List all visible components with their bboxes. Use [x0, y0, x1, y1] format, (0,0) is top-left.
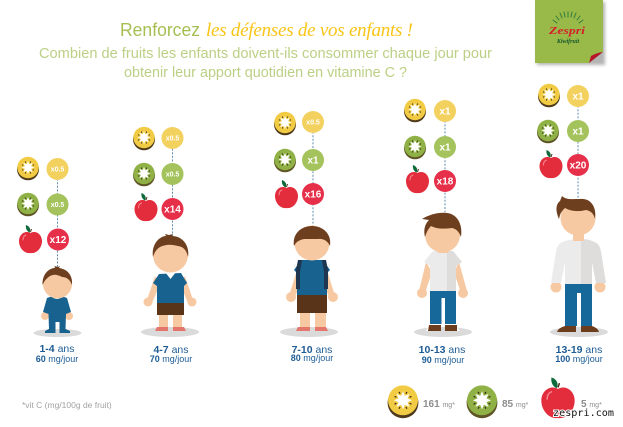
age label: 60 mg/jour [36, 354, 78, 364]
age label: 70 mg/jour [150, 354, 192, 364]
age label [291, 344, 333, 363]
column: 7-10 ans [274, 111, 338, 363]
badge x1 gold [434, 100, 456, 122]
legend: gold kiwi 161 mg [388, 385, 455, 418]
icon: gold kiwi [274, 112, 296, 135]
logo tag: Kiwifruit [556, 39, 580, 45]
badge x1 gold: x1 [439, 106, 451, 118]
figure: toddler [34, 266, 82, 337]
badge x0.5 gold: x0.5 [306, 120, 320, 126]
legend: green kiwi 85 mg [467, 385, 529, 418]
badge x1 green [567, 120, 589, 142]
badge x0.5 gold [162, 127, 184, 149]
footnote: *vit C (mg/100g de fruit) [22, 400, 112, 410]
badge x0.5 gold [46, 158, 68, 180]
figure: child with backpack [280, 226, 338, 337]
badge x12: x12 [50, 235, 67, 246]
age label [419, 344, 465, 365]
badge x1 green [302, 149, 324, 171]
badge x1 green [434, 136, 456, 158]
badge x20: x20 [570, 160, 587, 172]
column: 13-19 ans [537, 84, 608, 364]
legend: green kiwi 85 mg: 85 mg* [502, 399, 529, 410]
age label: 13-19 ans [556, 344, 602, 356]
badge x0.5 green: x0.5 [51, 202, 64, 209]
icon: gold kiwi [17, 157, 39, 180]
badge x0.5 green: x0.5 [166, 172, 179, 178]
icon: gold kiwi [133, 127, 155, 150]
badge x1 gold: x1 [572, 92, 584, 102]
age label [150, 344, 192, 364]
logo tag [535, 0, 605, 65]
icon: green kiwi [274, 149, 296, 172]
age label: 80 mg/jour [291, 353, 333, 363]
icon: green kiwi [404, 136, 426, 159]
icon: apple [406, 165, 429, 193]
badge x1 green: x1 [307, 156, 319, 166]
icon: gold kiwi [538, 84, 560, 107]
badge x20 [567, 154, 589, 176]
figure: boy in white t-shirt [414, 213, 472, 337]
age label: 1-4 ans [39, 343, 75, 355]
legend: gold kiwi 161 mg: 161 mg* [423, 399, 455, 410]
age label: 90 mg/jour [422, 355, 464, 365]
figure: teenager [550, 196, 608, 337]
column: 4-7 ans [133, 127, 199, 364]
column: 10-13 ans [404, 99, 472, 365]
badge x18: x18 [437, 176, 454, 188]
badge x1 gold [567, 85, 589, 107]
age label: 100 mg/jour [555, 354, 603, 364]
age label [555, 344, 603, 364]
title: les défenses de vos enfants ! [206, 20, 413, 41]
figure: child [141, 234, 199, 337]
age label [36, 343, 78, 364]
badge x1 green: x1 [439, 142, 451, 154]
badge x0.5 gold [302, 111, 324, 133]
title: Renforcez [120, 20, 200, 40]
age label: 7-10 ans [292, 344, 332, 356]
badge x0.5 gold: x0.5 [51, 166, 64, 174]
badge x18 [434, 170, 456, 192]
legend: apple 5 mg: 5 mg* [581, 399, 602, 410]
icon: apple [134, 193, 158, 221]
badge x0.5 green [162, 163, 184, 185]
age label: 4-7 ans [153, 344, 189, 356]
badge x14: x14 [164, 204, 181, 216]
subtitle: Combien de fruits les enfants doivent-ils consommer chaque jour pour [39, 45, 492, 62]
icon: apple [275, 180, 298, 208]
badge x1 green: x1 [572, 126, 584, 138]
badge x16: x16 [305, 190, 322, 200]
icon: apple [19, 225, 42, 253]
subtitle: obtenir leur apport quotidien en vitamine C ? [124, 64, 407, 81]
subtitle [39, 45, 492, 81]
icon: green kiwi [537, 120, 559, 143]
badge x0.5 gold: x0.5 [166, 136, 179, 142]
icon: green kiwi [17, 193, 39, 216]
icon: green kiwi [133, 163, 155, 186]
badge x0.5 green [46, 194, 68, 216]
icon: apple [540, 150, 562, 178]
column: 1-4 ans [17, 157, 82, 364]
logo tag: Zespri [548, 25, 586, 37]
badge x14 [162, 198, 184, 220]
watermark: zespri.com [553, 408, 614, 419]
icon: gold kiwi [404, 99, 426, 122]
badge x16 [302, 183, 324, 205]
badge x12 [47, 228, 69, 250]
legend: apple 5 mg [541, 377, 602, 418]
age label: 10-13 ans [419, 344, 465, 356]
